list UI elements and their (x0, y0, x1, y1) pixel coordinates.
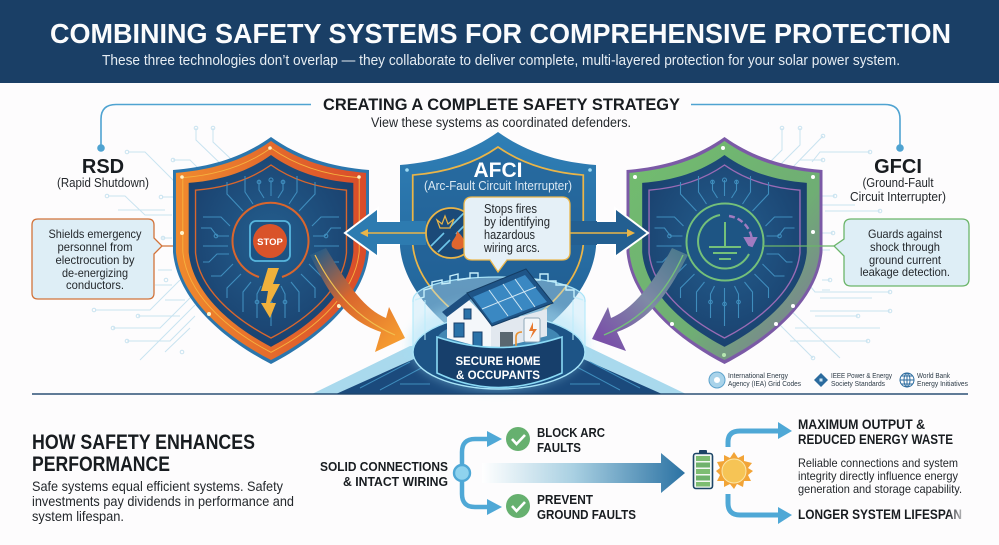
RSD label (57, 156, 149, 190)
check icon: prevent ground faults (506, 494, 530, 518)
sun icon (716, 452, 753, 489)
RSD callout: de-energizing (62, 266, 128, 280)
World Bank source (900, 371, 968, 388)
block arc faults text: BLOCK ARC (537, 425, 606, 440)
header banner (0, 0, 999, 83)
left double arrow (345, 208, 426, 257)
performance description: Safe systems equal efficient systems. Safety (32, 478, 283, 494)
right double arrow (568, 208, 648, 257)
block arc faults text: FAULTS (537, 440, 581, 455)
arc fault icon (426, 208, 476, 258)
AFCI speech bubble (464, 197, 570, 272)
AFCI speech bubble: by identifying (484, 215, 550, 229)
GFCI label: (Ground-Fault (862, 176, 934, 190)
RSD callout: Shields emergency (48, 227, 142, 241)
branching arrows (454, 431, 502, 515)
maximum output heading (798, 417, 953, 447)
solid connections label: & INTACT WIRING (343, 475, 448, 489)
AFCI speech bubble: Stops fires (484, 202, 537, 216)
GFCI callout: leakage detection. (860, 265, 950, 279)
subtitle: These three technologies don’t overlap — they collaborate to deliver complete, multi-layered protection for your solar power system. (102, 52, 900, 69)
circuit traces left (92, 126, 232, 360)
protective ring back wall (413, 273, 585, 389)
GFCI callout: Guards against (868, 227, 943, 241)
curved purple arrow (592, 248, 688, 351)
AFCI title: AFCI (474, 159, 522, 182)
maximum output heading: REDUCED ENERGY WASTE (798, 432, 953, 447)
performance description: investments pay dividends in performance and (32, 493, 294, 509)
World Bank source: Energy Initiatives (917, 379, 968, 388)
IEA source: Agency (IEA) Grid Codes (728, 379, 801, 388)
house with solar panels (442, 269, 553, 350)
large gradient arrow (482, 453, 685, 493)
prevent ground faults text (537, 492, 636, 522)
ring glow (408, 299, 588, 391)
output arrows (728, 422, 792, 524)
curved orange arrow (310, 248, 405, 352)
ground symbol emblem (686, 204, 764, 280)
performance description: system lifespan. (32, 508, 124, 524)
left connector line (97, 104, 311, 152)
IEA source: International Energy (728, 371, 788, 380)
STOP emblem: STOP (257, 237, 284, 248)
RSD callout: electrocution by (56, 253, 134, 267)
ring front posts (413, 300, 585, 373)
GFCI label: GFCI (874, 156, 922, 178)
GFCI shield (626, 137, 822, 364)
GFCI label: Circuit Interrupter) (850, 190, 946, 204)
RSD callout: conductors. (66, 278, 124, 292)
World Bank source: World Bank (917, 371, 950, 380)
output description: Reliable connections and system (798, 456, 958, 470)
AFCI speech bubble: hazardous (484, 228, 535, 242)
RSD shield (173, 137, 369, 364)
secure home ring and house (408, 269, 588, 391)
GFCI callout: shock through (870, 240, 940, 254)
heading: creating a complete safety strategy (323, 95, 681, 130)
solid connections label: SOLID CONNECTIONS (320, 460, 448, 474)
secure home label: SECURE HOME (456, 354, 540, 368)
circuit traces right (770, 126, 892, 360)
battery icon (694, 450, 712, 488)
GFCI label (850, 156, 946, 204)
output description: integrity directly influence energy (798, 469, 958, 483)
heading: how safety enhances performance: PERFORMANCE (32, 453, 170, 476)
longer system lifespan: LONGER SYSTEM LIFESPAN (798, 507, 962, 522)
secure home label (437, 337, 562, 388)
source logos (709, 371, 968, 388)
output description: generation and storage capability. (798, 482, 962, 496)
AFCI speech bubble: wiring arcs. (483, 241, 540, 255)
solid connections label (320, 460, 448, 489)
IEEE source (814, 371, 892, 388)
prevent ground faults text: PREVENT (537, 492, 593, 507)
RSD label: (Rapid Shutdown) (57, 176, 149, 190)
check icon: block arc faults (506, 427, 530, 451)
GFCI callout: ground current (869, 253, 942, 267)
main title: COMBINING SAFETY SYSTEMS FOR COMPREHENSIVE PROTECTION (50, 18, 951, 49)
secure home label: & OCCUPANTS (456, 368, 540, 382)
lightning bolt icon (261, 268, 280, 318)
circuit ground platform (312, 346, 686, 394)
output description (798, 456, 962, 496)
heading: how safety enhances performance (32, 431, 255, 476)
heading: creating a complete safety strategy: CREATING A COMPLETE SAFETY STRATEGY (323, 95, 681, 114)
section divider rule (32, 393, 968, 395)
AFCI subtitle: (Arc-Fault Circuit Interrupter) (424, 179, 572, 193)
IEEE source: Society Standards (831, 379, 885, 388)
AFCI shield (400, 132, 596, 359)
IEA source (709, 371, 801, 388)
block arc faults text (537, 425, 606, 455)
STOP emblem (233, 203, 308, 277)
maximum output heading: MAXIMUM OUTPUT & (798, 417, 925, 432)
right connector line (691, 104, 904, 152)
IEEE source: IEEE Power & Energy (831, 371, 892, 380)
heading: creating a complete safety strategy: View these systems as coordinated defenders. (371, 115, 631, 130)
GFCI callout (763, 219, 969, 286)
heading: how safety enhances performance: HOW SAFETY ENHANCES (32, 431, 255, 454)
performance description (32, 478, 294, 524)
RSD label: RSD (82, 156, 124, 178)
RSD callout (32, 219, 232, 299)
prevent ground faults text: GROUND FAULTS (537, 507, 636, 522)
RSD callout: personnel from (58, 240, 132, 254)
